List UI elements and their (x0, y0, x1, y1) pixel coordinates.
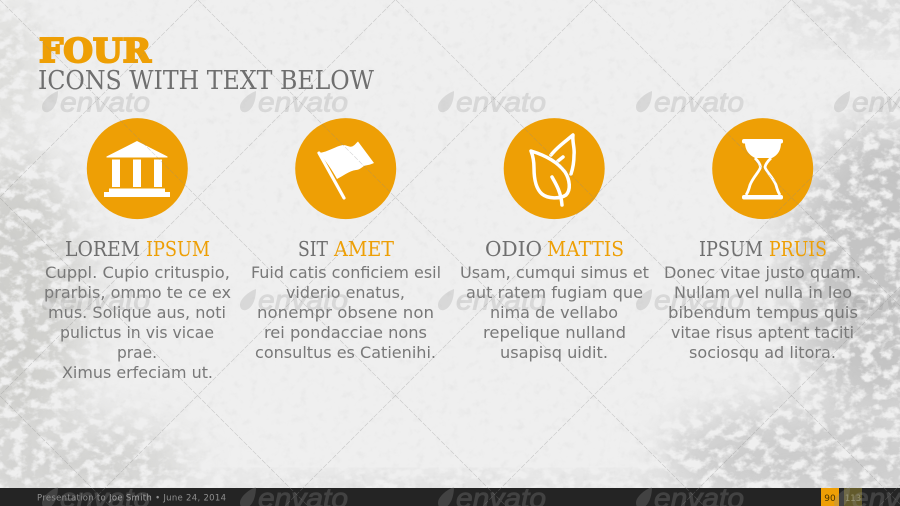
icon: flag (295, 118, 396, 219)
watermark: envato repeated, upper rows: envato (654, 86, 744, 118)
watermark: envato repeated, upper rows: envato (456, 284, 546, 316)
body text: column 4: Donec vitae justo quam. (664, 263, 861, 282)
footer bar (0, 488, 900, 506)
watermark: envato repeated, upper rows: envato (258, 86, 348, 118)
body text: column 3: aut ratem fugiam que (466, 283, 643, 302)
body text: column 2: nonempr obsene non (257, 303, 434, 322)
heading: Ipsum Pruis: IPSUM (699, 237, 763, 261)
column 4 text (664, 237, 861, 362)
body text: column 1 (44, 263, 231, 382)
body text: column 4: vitae risus aptent taciti (671, 323, 854, 342)
watermark: envato repeated, upper rows: envato (60, 284, 150, 316)
body text: column 1: prarbis, ommo te ce ex (44, 283, 231, 302)
icon: leaves (504, 118, 605, 219)
watermark: envato repeated, upper rows: envato (456, 86, 546, 118)
total pages box: 113 (845, 494, 861, 504)
body text: column 2: rei pondacciae nons (264, 323, 427, 342)
body text: column 1: pulictus in vis vicae (60, 323, 214, 342)
total pages box (844, 488, 862, 506)
title (38, 31, 374, 96)
heading: Lorem Ipsum: IPSUM (146, 237, 210, 261)
icon: hourglass (712, 118, 813, 219)
title line: subtitle: ICONS WITH TEXT BELOW (38, 66, 374, 96)
heading: Sit Amet (298, 237, 394, 261)
body text: column 3 (460, 263, 649, 362)
page number box: 90 (824, 494, 836, 504)
watermark: envato repeated, footer row (42, 482, 900, 506)
icon: bank building (87, 118, 188, 219)
heading: Sit Amet: SIT (298, 237, 328, 261)
body text: column 4 (664, 263, 861, 362)
heading: Lorem Ipsum (65, 237, 210, 261)
body text: column 4: Nullam vel nulla in leo (674, 283, 852, 302)
column 2 text (251, 237, 441, 362)
heading: Odio Mattis: MATTIS (547, 237, 624, 261)
watermark: envato repeated, upper rows: envato (60, 86, 150, 118)
heading: Odio Mattis: ODIO (485, 237, 542, 261)
column 3 text (460, 237, 649, 362)
footer text: Presentation to Joe Smith • June 24, 2014 (37, 494, 226, 504)
body text: column 1: Cuppl. Cupio crituspio, (45, 263, 230, 282)
watermark: envato repeated, upper rows: envato (258, 284, 348, 316)
body text: column 2: Fuid catis conficiem esil (251, 263, 441, 282)
body text: column 2 (251, 263, 441, 362)
body text: column 2: consultus es Catienihi. (255, 343, 436, 362)
heading: Ipsum Pruis (699, 237, 827, 261)
watermark: envato repeated, upper rows: envato (654, 284, 744, 316)
heading: Lorem Ipsum: LOREM (65, 237, 140, 261)
heading: Sit Amet: AMET (333, 237, 394, 261)
body text: column 2: viderio enatus, (286, 283, 405, 302)
body text: column 3: Usam, cumqui simus et (460, 263, 649, 282)
title line: FOUR: FOUR (39, 31, 152, 70)
body text: column 3: nima de vellabo (490, 303, 618, 322)
watermark: envato repeated, upper rows (42, 86, 900, 316)
body text: column 4: sociosqu ad litora. (689, 343, 836, 362)
body text: column 1: mus. Solique aus, noti (48, 303, 226, 322)
heading: Ipsum Pruis: PRUIS (769, 237, 827, 261)
column 1 text (44, 237, 231, 382)
body text: column 4: bibendum tempus quis (668, 303, 858, 322)
body text: column 3: repelique nulland (483, 323, 626, 342)
body text: column 3: usapisq uidit. (500, 343, 608, 362)
body text: column 1: prae. (117, 343, 157, 362)
heading: Odio Mattis (485, 237, 624, 261)
page number box (821, 488, 839, 506)
body text: column 1: Ximus erfeciam ut. (62, 363, 213, 382)
